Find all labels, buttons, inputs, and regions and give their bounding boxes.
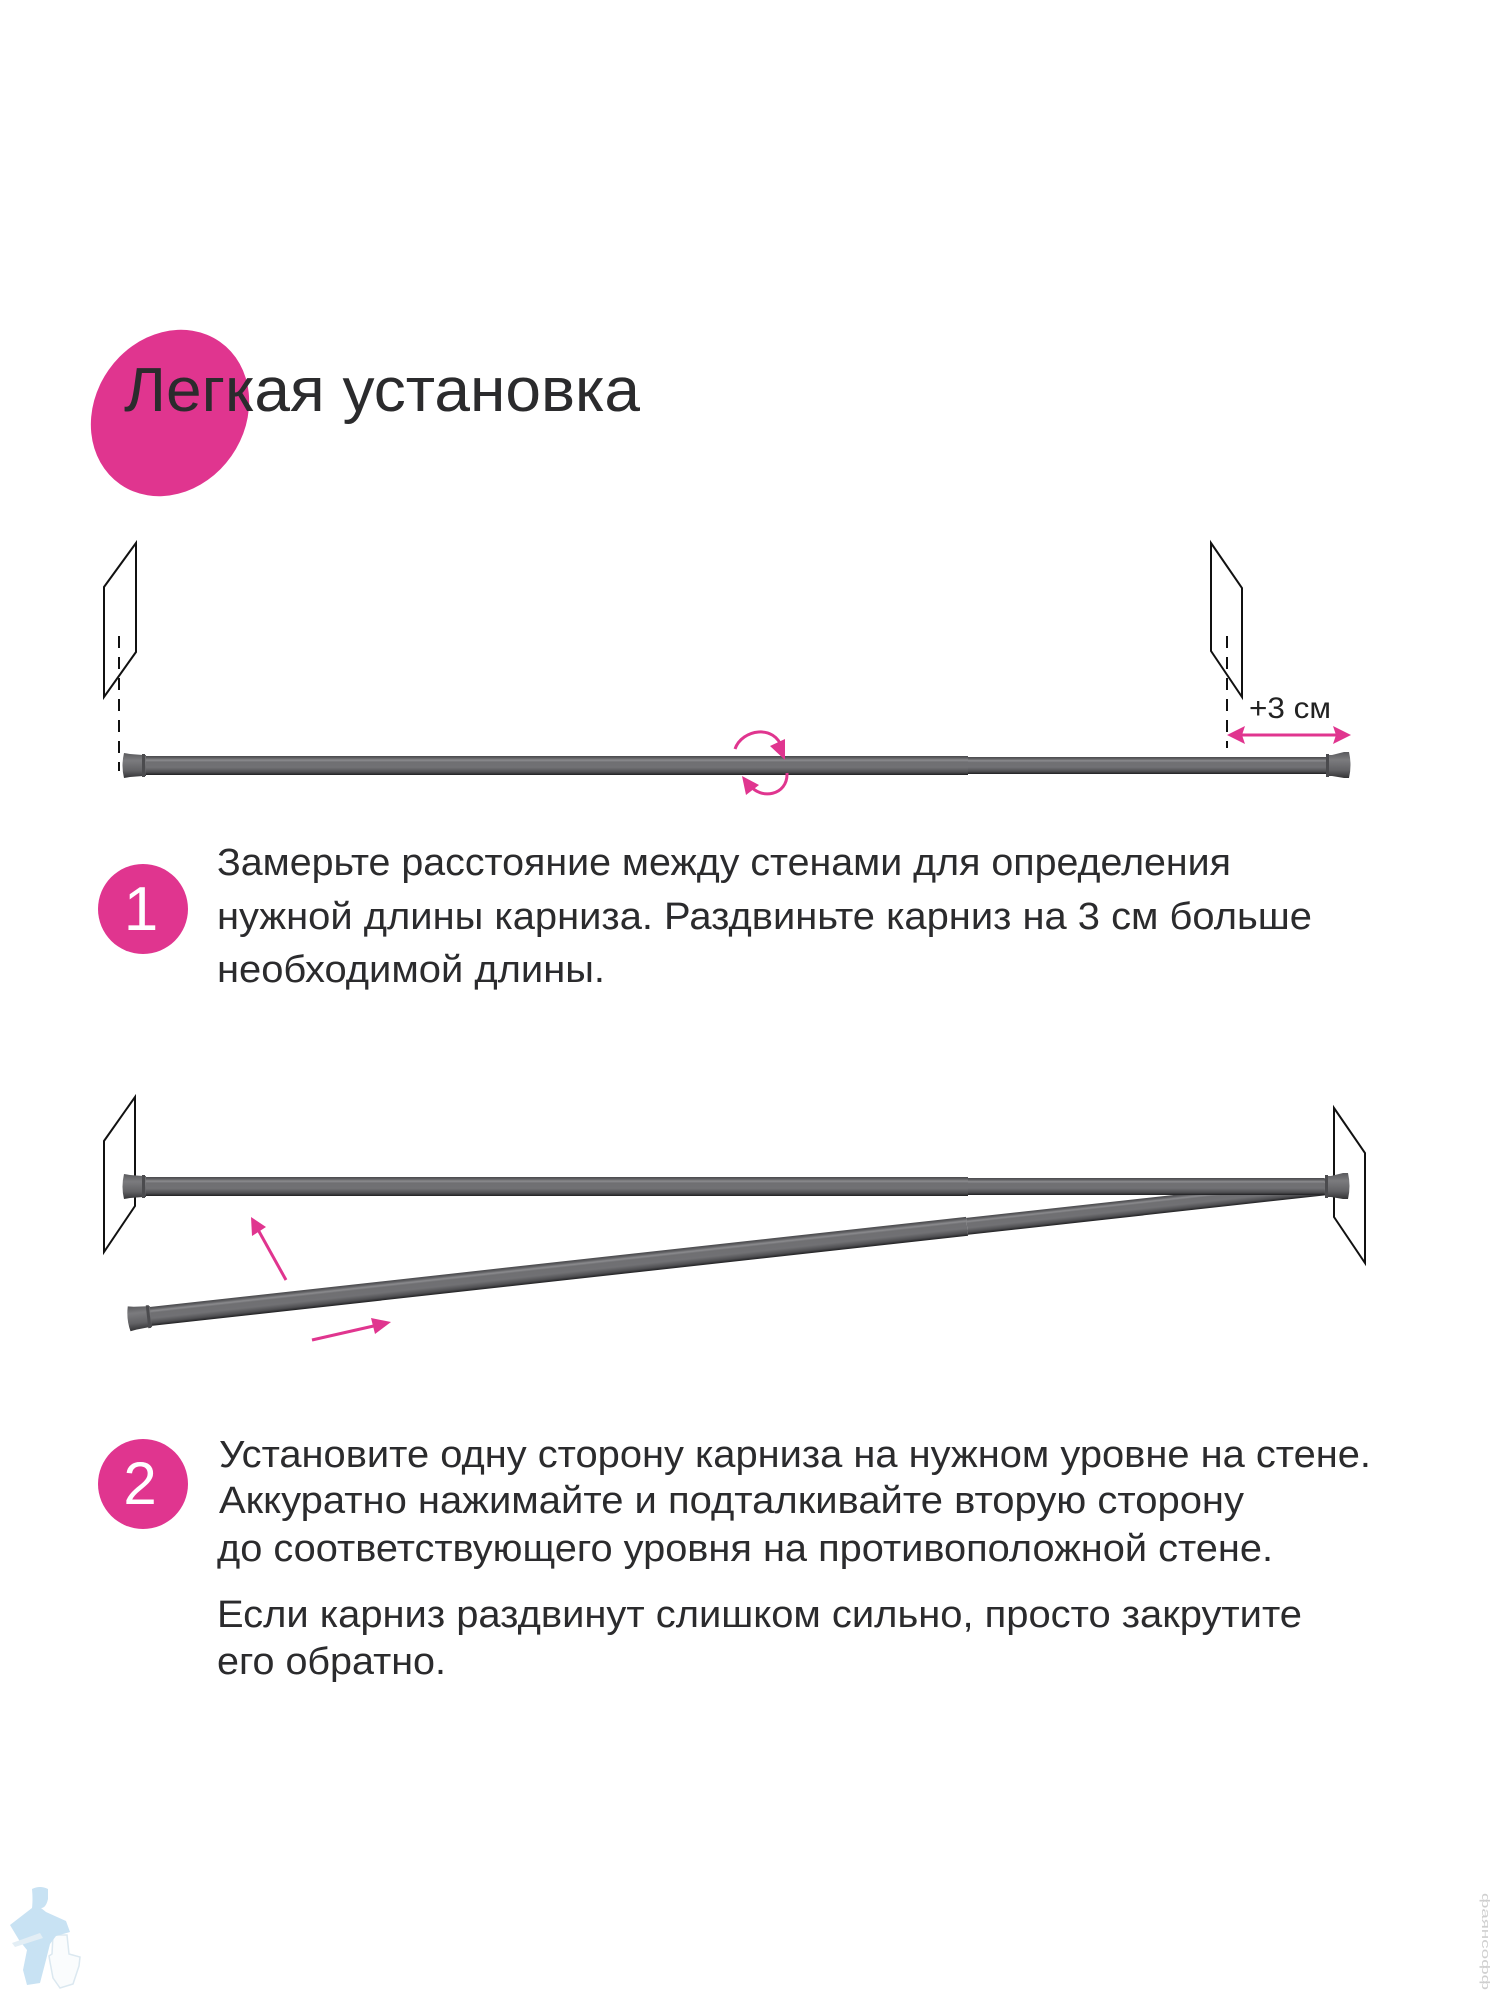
step 2 badge [98,1439,188,1529]
step 1 text: нужной длины карниза. Раздвиньте карниз на 3 см больше [217,896,1312,938]
step 2 text: Аккуратно нажимайте и подталкивайте вторую сторону [219,1480,1244,1522]
dimension label: +3 см [1249,692,1331,725]
step 2 diagram [104,1097,1365,1340]
step 2 text: до соответствующего уровня на противоположной стене. [217,1528,1273,1570]
tilted rod [126,1174,1331,1331]
right wall [1211,543,1242,697]
plumber [10,1887,70,1985]
title: Легкая установка [124,356,641,425]
step 2 text [217,1434,1371,1683]
telescopic rod [122,752,1350,778]
toilet [49,1935,80,1988]
arrow: push along [312,1318,391,1340]
step 1 text: необходимой длины. [217,949,605,991]
right wall [1334,1108,1365,1263]
wrench [12,1933,43,1947]
step 2 text: Установите одну сторону карниза на нужном уровне на стене. [219,1434,1371,1476]
dimension arrow [1227,726,1351,744]
right measure line [1226,636,1228,748]
step 2 text: его обратно. [217,1641,446,1683]
step 1 diagram [104,543,1351,795]
step 2 badge: 2 [123,1450,157,1517]
left wall [104,1097,135,1252]
step 1 badge [98,864,188,954]
installed rod [122,1173,1350,1199]
watermark: plumber with toilet [10,1887,80,1988]
step 1 text: Замерьте расстояние между стенами для определения [217,842,1231,884]
step 2 text: Если карниз раздвинут слишком сильно, просто закрутите [217,1594,1302,1636]
watermark: brand text: фаянсофф [1479,1893,1491,1990]
step 1 text [217,842,1312,991]
heading accent: pink blob [59,299,281,527]
left measure line [118,636,120,771]
rotation arrows [735,732,787,795]
left wall [104,543,136,697]
step 1 badge: 1 [124,875,158,944]
arrow: press up [251,1217,286,1280]
